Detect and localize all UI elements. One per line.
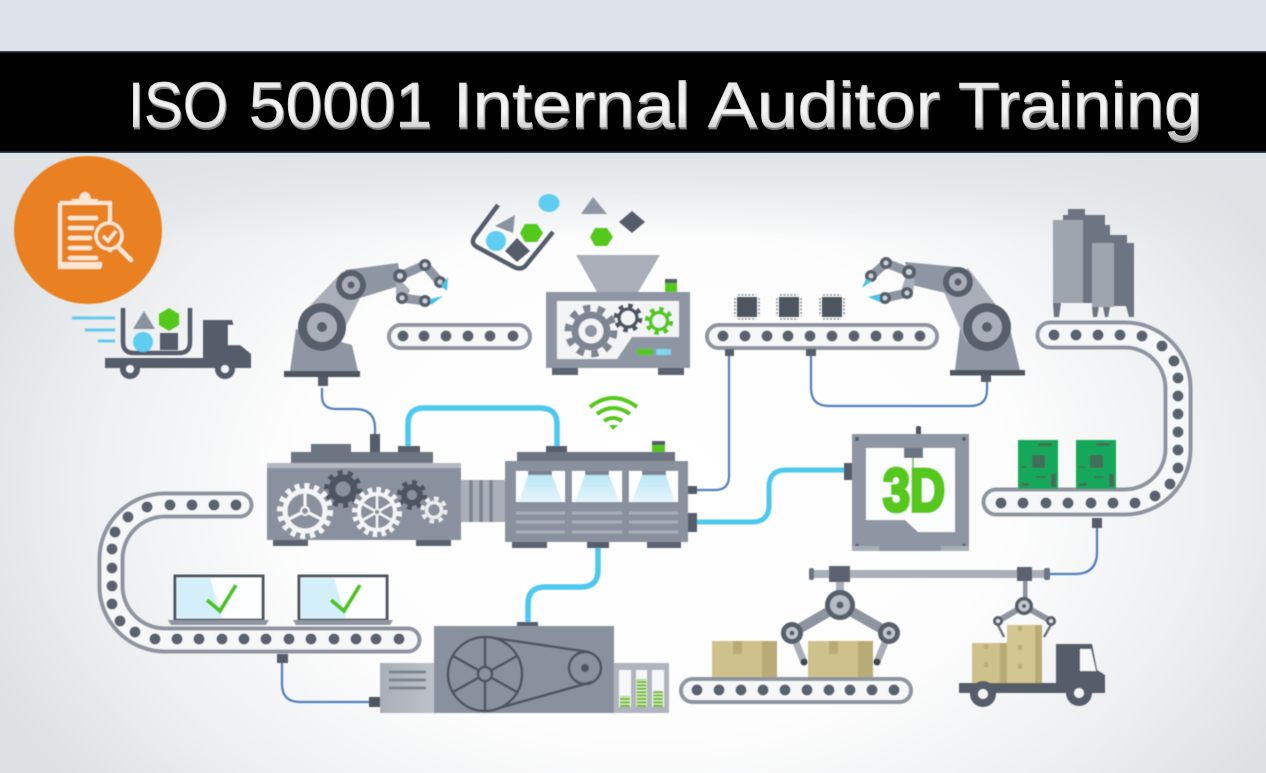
cardboard boxes on conveyor bbox=[712, 641, 873, 677]
small conveyor top left bbox=[389, 325, 530, 348]
control cables bbox=[697, 356, 987, 490]
right robot arm bbox=[862, 257, 1025, 382]
small gripper bbox=[993, 581, 1056, 637]
bottom conveyor bbox=[681, 679, 911, 702]
left conveyor bbox=[106, 500, 408, 702]
microchips bbox=[735, 295, 844, 319]
wifi symbol bbox=[590, 398, 637, 430]
overhead rail bbox=[809, 566, 1050, 582]
large right conveyor bbox=[996, 330, 1184, 508]
3D printer: 3D bbox=[883, 457, 945, 524]
connecting tube between machines bbox=[461, 480, 505, 522]
large gripper bbox=[781, 582, 900, 666]
gear machine bbox=[267, 442, 461, 546]
top middle conveyor bbox=[707, 325, 937, 356]
left delivery truck bbox=[72, 308, 251, 379]
laptops with check marks bbox=[168, 576, 393, 625]
right delivery truck with boxes bbox=[959, 625, 1105, 707]
title banner: Training bbox=[958, 69, 1202, 141]
3D printer bbox=[844, 426, 969, 551]
cable to rail bbox=[1050, 518, 1102, 574]
belt-drive machine bbox=[369, 622, 669, 713]
cyan pipes bbox=[408, 408, 845, 623]
falling parts bbox=[538, 194, 645, 246]
title banner: 50001 bbox=[249, 69, 432, 141]
illustration bbox=[14, 156, 1184, 713]
feeder machine with gears bbox=[546, 255, 690, 375]
light-window machine bbox=[505, 441, 697, 548]
icon: orange audit badge bbox=[14, 156, 162, 304]
circuit boards bbox=[1018, 440, 1116, 489]
title banner bbox=[0, 51, 1266, 153]
left robot arm bbox=[284, 259, 448, 452]
title banner: ISO bbox=[128, 69, 228, 141]
silos bbox=[1053, 209, 1134, 317]
title banner: Internal bbox=[453, 69, 690, 141]
title banner: Auditor bbox=[708, 69, 940, 141]
tilted parts basket bbox=[473, 205, 553, 268]
